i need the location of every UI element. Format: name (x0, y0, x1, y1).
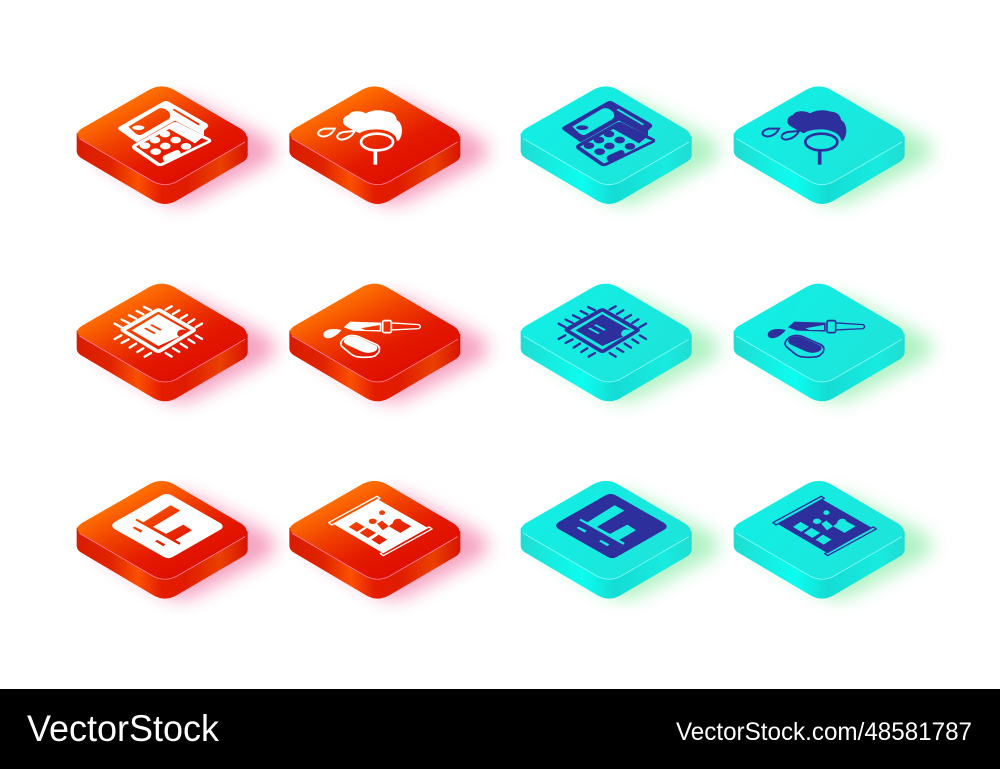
red tile: processor chip (77, 284, 275, 401)
teal tile: processor chip (521, 284, 719, 401)
footer bar (0, 689, 1000, 769)
teal tile: fax calculator (521, 86, 719, 204)
red tile: chart scroll (289, 481, 488, 599)
teal tile: cloud with magnifier and drops (734, 86, 932, 204)
footer bar: VectorStock.com/48581787 (676, 718, 972, 746)
red tile: dropper and jar (289, 284, 488, 401)
red tile: fax calculator (77, 86, 275, 204)
teal tile: chart scroll (734, 481, 932, 599)
teal tile: bar chart card (521, 481, 719, 599)
red tile: bar chart card (77, 481, 275, 599)
footer bar: VectorStock (27, 708, 219, 749)
red tile: cloud with magnifier and drops (289, 86, 488, 204)
teal tile: dropper and jar (734, 284, 932, 401)
